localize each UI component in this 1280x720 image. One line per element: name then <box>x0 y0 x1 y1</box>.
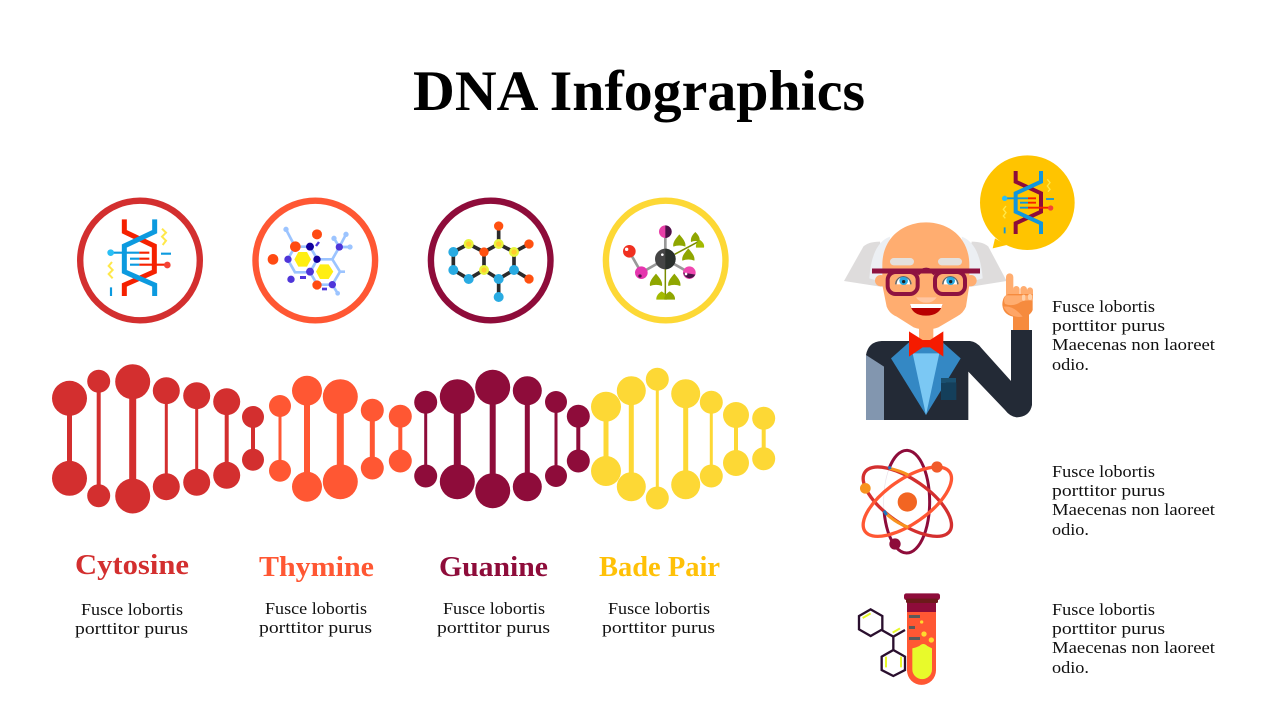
scientist hair <box>844 237 1007 287</box>
icon: test tube with molecule <box>859 593 940 685</box>
text: Cytosine description <box>75 600 188 638</box>
icon: cytosine DNA in red circle <box>80 201 200 320</box>
DNA helix: thymine strand <box>269 376 412 502</box>
DNA helix: guanine strand <box>414 370 590 508</box>
text: Bade Pair description <box>602 599 715 637</box>
heading: Bade Pair: Bade Pair <box>599 552 720 583</box>
text: Cytosine description: porttitor purus <box>75 619 188 638</box>
heading: Thymine: Thymine <box>259 552 374 583</box>
text: test tube description: Fusce lobortis <box>1052 600 1155 619</box>
text: Guanine description: Fusce lobortis <box>443 599 545 618</box>
text: scientist description <box>1052 297 1215 374</box>
icon: thymine molecule in orange circle <box>255 201 375 320</box>
scientist suit <box>866 330 1032 420</box>
icon: atom <box>852 450 962 553</box>
scientist glasses <box>872 269 980 294</box>
text: test tube description: porttitor purus <box>1052 619 1165 638</box>
heading: Cytosine: Cytosine <box>75 550 189 581</box>
text: atom description: Maecenas non laoreet <box>1052 500 1215 519</box>
text: Bade Pair description: Fusce lobortis <box>608 599 710 618</box>
text: scientist description: Maecenas non laoreet <box>1052 335 1215 354</box>
text: test tube description: Maecenas non laoreet <box>1052 638 1215 657</box>
text: Cytosine description: Fusce lobortis <box>81 600 183 619</box>
text: atom description: porttitor purus <box>1052 481 1165 500</box>
text: test tube description: odio. <box>1052 658 1089 677</box>
text: scientist description: porttitor purus <box>1052 316 1165 335</box>
text: Thymine description: porttitor purus <box>259 618 372 637</box>
text: scientist description: Fusce lobortis <box>1052 297 1155 316</box>
scientist neck <box>919 320 933 343</box>
text: Guanine description <box>437 599 550 637</box>
text: Thymine description <box>259 599 372 637</box>
text: Guanine description: porttitor purus <box>437 618 550 637</box>
illustration: scientist with speech bubble <box>844 155 1075 420</box>
DNA helix: base pair strand <box>591 368 775 510</box>
text: Bade Pair description: porttitor purus <box>602 618 715 637</box>
icon: guanine molecule in maroon circle <box>431 201 550 320</box>
text: atom description <box>1052 462 1215 539</box>
icon: base pair molecule with leaves in yellow circle <box>606 201 726 320</box>
speech bubble with DNA <box>980 155 1075 250</box>
scientist head <box>875 222 977 329</box>
text: test tube description <box>1052 600 1215 677</box>
heading: Guanine: Guanine <box>439 552 548 583</box>
text: atom description: Fusce lobortis <box>1052 462 1155 481</box>
DNA helix: cytosine strand <box>52 364 264 514</box>
scientist bow tie <box>909 331 943 357</box>
scientist hand pointing up <box>1002 273 1033 330</box>
text: Thymine description: Fusce lobortis <box>265 599 367 618</box>
text: scientist description: odio. <box>1052 355 1089 374</box>
title: DNA Infographics <box>413 60 865 123</box>
text: atom description: odio. <box>1052 520 1089 539</box>
